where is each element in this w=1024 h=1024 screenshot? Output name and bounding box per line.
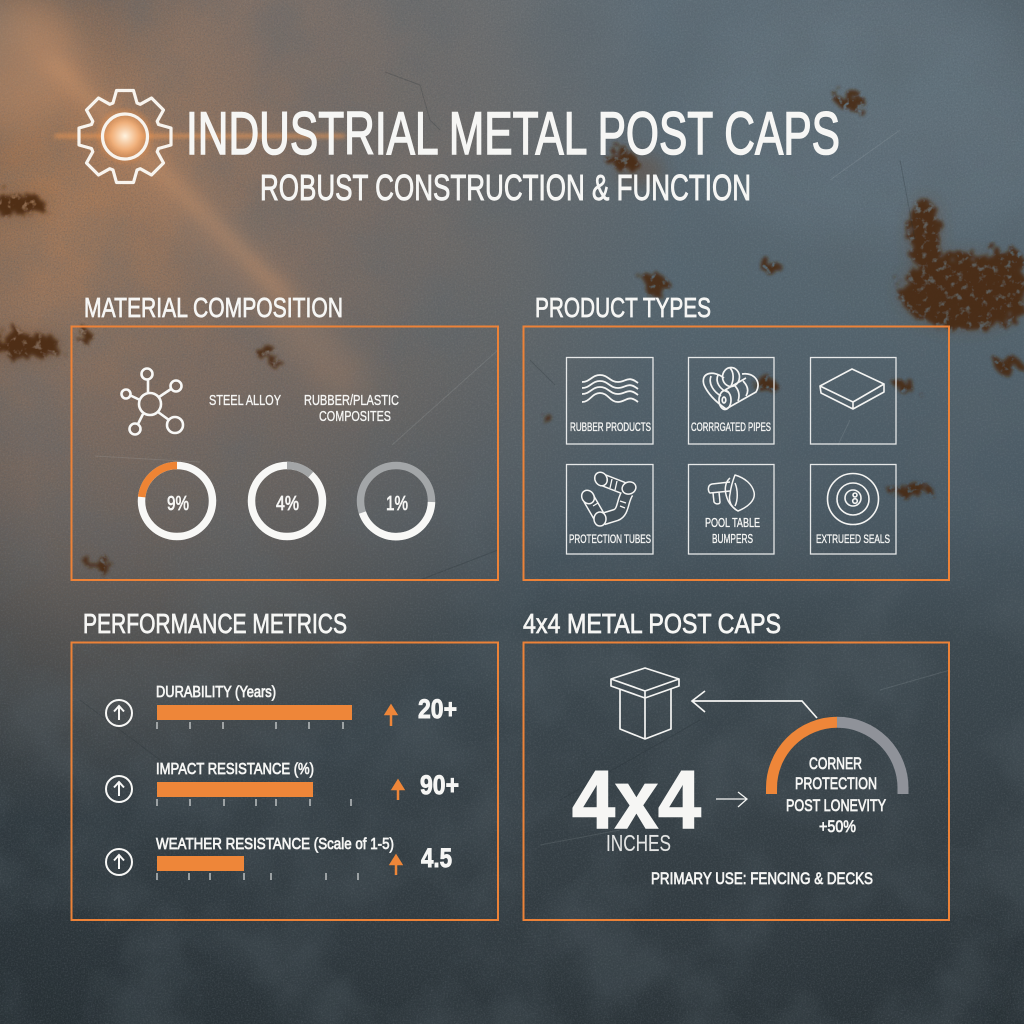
- gauge: corner protection: PROTECTION: [795, 774, 877, 793]
- product: pool table bumpers: POOL TABLE: [705, 515, 760, 530]
- gauge: corner protection: [772, 722, 903, 836]
- metric: weather resistance: 4.5: [421, 843, 452, 873]
- panel frame: [524, 642, 949, 920]
- arrow: gauge to post cap: [692, 691, 817, 718]
- donut: 9%: [142, 465, 212, 536]
- product: extruded seals: EXTRUEED SEALS: [816, 532, 890, 546]
- subtitle: ROBUST CONSTRUCTION & FUNCTION: [260, 167, 751, 208]
- product: extruded seals: [810, 464, 896, 554]
- heading: 4x4 metal post caps: 4x4 METAL POST CAPS: [523, 608, 781, 639]
- icon: molecule network: [122, 368, 183, 434]
- donut: 1%: [360, 466, 432, 537]
- gauge: corner protection: POST LONEVITY: [786, 796, 886, 815]
- label: rubber/plastic composites: COMPOSITES: [319, 408, 391, 425]
- panel: product types: [524, 292, 949, 580]
- label: steel alloy: STEEL ALLOY: [209, 392, 281, 409]
- donut: 1%: 1%: [386, 493, 408, 515]
- metric: weather resistance: WEATHER RESISTANCE (Scale of 1-5): [156, 836, 394, 853]
- icon: gear: [79, 90, 171, 182]
- primary use text: PRIMARY USE: FENCING & DECKS: [651, 869, 873, 888]
- product: rubber products: RUBBER PRODUCTS: [570, 420, 651, 434]
- donut: 9%: 9%: [167, 493, 189, 515]
- big number: 4x4 inches: INCHES: [606, 830, 671, 856]
- metric: durability: DURABILITY (Years): [156, 684, 276, 701]
- arrow: size to gauge: [716, 792, 747, 807]
- big number: 4x4 inches: 4x4: [572, 753, 701, 846]
- panel: performance metrics: [72, 608, 498, 920]
- product: corrugated pipes: CORRRGATED PIPES: [691, 420, 771, 434]
- donut: 4%: 4%: [276, 493, 299, 515]
- panel: 4x4 metal post caps: [523, 608, 949, 920]
- metric: weather resistance: [106, 836, 452, 880]
- label: rubber/plastic composites: RUBBER/PLASTIC: [304, 392, 399, 409]
- metric: durability: 20+: [418, 694, 457, 724]
- product: protection tubes: PROTECTION TUBES: [569, 532, 651, 546]
- metric: impact resistance: [106, 761, 459, 806]
- metric: impact resistance: 90+: [420, 770, 459, 800]
- donut: 4%: [252, 465, 322, 536]
- heading: material composition: MATERIAL COMPOSITION: [84, 292, 343, 323]
- product: rubber products: [566, 358, 653, 444]
- panel frame: [72, 326, 498, 580]
- heading: performance metrics: PERFORMANCE METRICS: [83, 608, 347, 639]
- metric: durability: [106, 684, 457, 729]
- panel frame: [72, 642, 498, 920]
- header: gear icon and title: [79, 90, 840, 208]
- panel frame: [524, 326, 949, 580]
- product: flat slab: [810, 358, 896, 444]
- gauge: corner protection: +50%: [819, 817, 856, 836]
- panel: material composition: [72, 292, 498, 580]
- metric: impact resistance: IMPACT RESISTANCE (%): [156, 761, 314, 778]
- icon: post cap box: [611, 668, 679, 739]
- heading: product types: PRODUCT TYPES: [535, 292, 711, 323]
- label: rubber/plastic composites: [304, 392, 399, 425]
- product: pool table bumpers: BUMPERS: [712, 531, 753, 546]
- gauge: corner protection: CORNER: [809, 754, 862, 773]
- product: pool table bumpers: [688, 464, 774, 554]
- product: protection tubes: [566, 464, 653, 554]
- product: corrugated pipes: [688, 358, 774, 444]
